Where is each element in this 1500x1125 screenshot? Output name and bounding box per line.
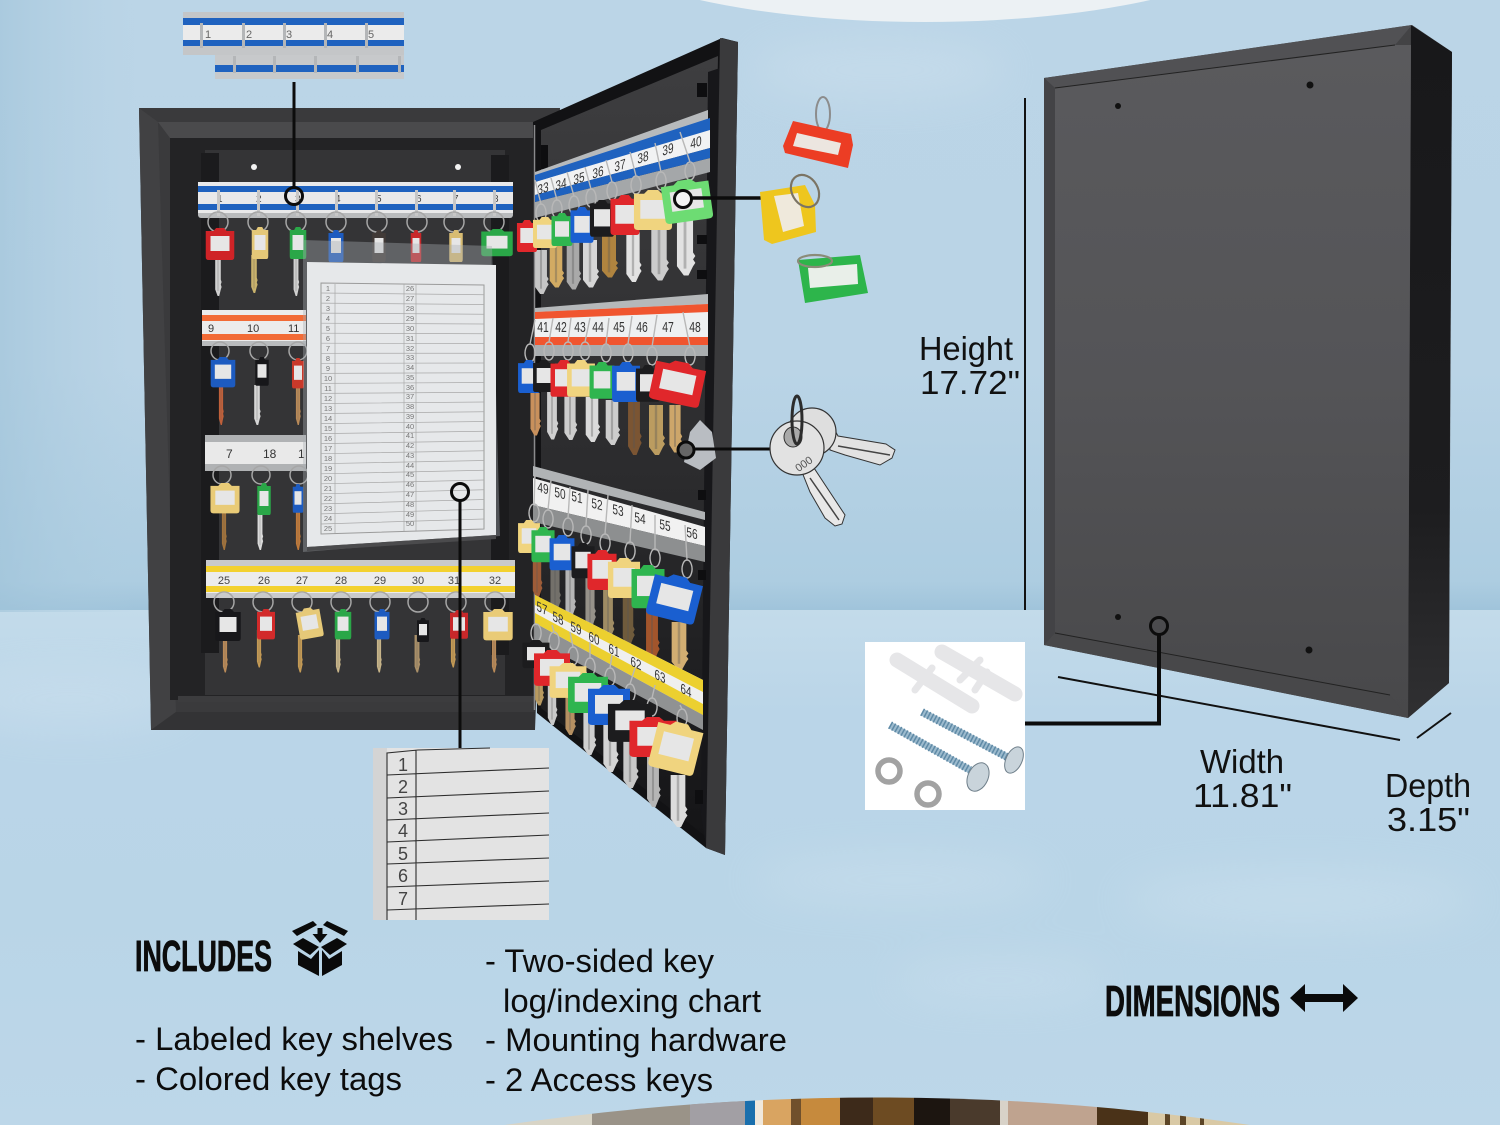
door blue shelf, hooks 33-40: 37 — [614, 156, 626, 175]
plastic sleeve and two-sided key log chart: 33 — [406, 353, 414, 362]
inset: key log chart close-up: 3 — [398, 799, 408, 819]
top white curved banner — [565, 0, 1285, 22]
plastic sleeve and two-sided key log chart: 1 — [326, 284, 330, 293]
includes list, right column: - Mounting hardware — [485, 1022, 787, 1058]
door yellow shelf, hooks 57-64 — [535, 595, 703, 730]
includes list, right column: - 2 Access keys — [485, 1062, 713, 1098]
plastic sleeve and two-sided key log chart: 7 — [326, 344, 330, 353]
plastic sleeve and two-sided key log chart: 44 — [406, 461, 414, 470]
door yellow shelf, hooks 57-64: 62 — [631, 653, 641, 674]
product: back of cabinet — [1044, 25, 1452, 718]
callout: key log line — [452, 484, 468, 748]
callout: access key line — [678, 442, 771, 458]
blue key shelf, hooks 1-8: 3 — [295, 194, 301, 205]
yellow key shelf, hooks 25-32: 29 — [374, 575, 386, 587]
yellow key shelf, hooks 25-32: 26 — [258, 575, 270, 587]
inset: key log chart close-up: 1 — [398, 755, 408, 775]
inset: key log chart close-up: 7 — [398, 889, 408, 909]
orange key shelf, hooks 9-11: 11 — [288, 323, 299, 335]
door lock cam — [684, 420, 716, 470]
plastic sleeve and two-sided key log chart — [303, 240, 500, 552]
plastic sleeve and two-sided key log chart: 37 — [406, 392, 414, 401]
plastic sleeve and two-sided key log chart: 3 — [326, 304, 330, 313]
yellow key shelf, hooks 25-32: 28 — [335, 575, 347, 587]
plastic sleeve and two-sided key log chart: 26 — [406, 284, 414, 293]
bottom curved photo strip — [506, 1098, 1250, 1125]
width label — [1193, 743, 1292, 814]
inset: key log chart close-up — [373, 748, 549, 920]
plastic sleeve and two-sided key log chart: 6 — [326, 334, 330, 343]
heading: dimensions: DIMENSIONS — [1105, 977, 1280, 1026]
inset: labeled key shelf close-up: 3 — [286, 29, 292, 41]
plastic sleeve and two-sided key log chart: 14 — [324, 414, 332, 423]
blue key shelf, hooks 1-8: 2 — [256, 194, 262, 205]
door yellow shelf, hooks 57-64: 60 — [589, 628, 599, 649]
callout: key tag line — [674, 190, 762, 208]
dimension line: depth — [1417, 713, 1451, 738]
plastic sleeve and two-sided key log chart: 4 — [326, 314, 330, 323]
yellow key shelf, hooks 25-32: 31 — [448, 575, 460, 587]
plastic sleeve and two-sided key log chart: 2 — [326, 294, 330, 303]
door white shelf, hooks 49-56: 50 — [554, 484, 566, 503]
cabinet body frame — [139, 108, 560, 730]
plastic sleeve and two-sided key log chart: 10 — [324, 374, 332, 383]
plastic sleeve and two-sided key log chart: 31 — [406, 334, 414, 343]
plastic sleeve and two-sided key log chart: 15 — [324, 424, 332, 433]
white key shelf, hooks 17-19: 18 — [263, 447, 277, 461]
door orange shelf, hooks 41-48: 46 — [636, 319, 648, 335]
plastic sleeve and two-sided key log chart: 11 — [324, 384, 332, 393]
orange key shelf, hooks 9-11: 9 — [208, 323, 214, 335]
plastic sleeve and two-sided key log chart: 29 — [406, 314, 414, 323]
includes list, left column: - Labeled key shelves — [135, 1021, 453, 1057]
plastic sleeve and two-sided key log chart: 35 — [406, 373, 414, 382]
yellow key shelf, hooks 25-32: 27 — [296, 575, 308, 587]
icon: double-headed arrow — [1290, 984, 1358, 1012]
inset: labeled key shelf close-up: 1 — [205, 29, 211, 41]
plastic sleeve and two-sided key log chart: 48 — [406, 500, 414, 509]
plastic sleeve and two-sided key log chart: 30 — [406, 324, 414, 333]
door orange shelf, hooks 41-48: 44 — [592, 319, 604, 335]
keys on white shelf — [210, 466, 308, 550]
inset: key log chart close-up: 2 — [398, 777, 408, 797]
yellow key shelf, hooks 25-32: 32 — [489, 575, 501, 587]
door white shelf, hooks 49-56: 55 — [659, 516, 671, 535]
door blue shelf, hooks 33-40: 33 — [537, 179, 549, 198]
plastic sleeve and two-sided key log chart: 27 — [406, 294, 414, 303]
door orange shelf, hooks 41-48: 42 — [555, 319, 567, 335]
door orange shelf, hooks 41-48: 43 — [574, 319, 586, 335]
orange key shelf, hooks 9-11 — [202, 310, 306, 346]
plastic sleeve and two-sided key log chart: 43 — [406, 451, 414, 460]
door yellow shelf, hooks 57-64: 57 — [537, 598, 547, 619]
height label: 17.72" — [920, 364, 1020, 401]
door yellow shelf, hooks 57-64: 64 — [681, 680, 691, 701]
inset: key log chart close-up: 4 — [398, 821, 408, 841]
yellow key shelf, hooks 25-32: 30 — [412, 575, 424, 587]
orange key shelf, hooks 9-11: 10 — [247, 323, 259, 335]
door white shelf, hooks 49-56: 49 — [537, 479, 549, 498]
includes list, right column: log/indexing chart — [503, 983, 761, 1019]
door blue shelf, hooks 33-40: 39 — [662, 140, 674, 159]
keys on door yellow shelf — [522, 624, 705, 827]
includes list, left column — [135, 1021, 453, 1097]
open cabinet door — [533, 38, 738, 855]
plastic sleeve and two-sided key log chart: 50 — [406, 519, 414, 528]
width label: Width — [1200, 743, 1284, 780]
keys on orange shelf — [211, 342, 307, 425]
plastic sleeve and two-sided key log chart: 40 — [406, 422, 414, 431]
icon: yellow key tag — [760, 170, 825, 244]
depth label: Depth — [1385, 767, 1471, 804]
door orange shelf, hooks 41-48: 47 — [662, 319, 674, 335]
plastic sleeve and two-sided key log chart: 17 — [324, 444, 332, 453]
plastic sleeve and two-sided key log chart: 34 — [406, 363, 414, 372]
door blue shelf, hooks 33-40: 34 — [555, 175, 567, 194]
white key shelf, hooks 17-19: 7 — [226, 447, 233, 461]
includes list, right column: - Two-sided key — [485, 943, 714, 979]
dimension line: width — [1058, 677, 1400, 740]
blue key shelf, hooks 1-8: 7 — [453, 194, 459, 205]
plastic sleeve and two-sided key log chart: 46 — [406, 480, 414, 489]
door yellow shelf, hooks 57-64: 61 — [609, 640, 619, 661]
plastic sleeve and two-sided key log chart: 47 — [406, 490, 414, 499]
height label — [919, 330, 1020, 401]
icon: red key tag — [783, 97, 853, 168]
inset: labeled key shelf close-up: 5 — [368, 29, 374, 41]
door white shelf, hooks 49-56: 52 — [591, 495, 603, 514]
door orange shelf, hooks 41-48: 48 — [689, 319, 701, 335]
includes list, right column — [485, 943, 787, 1098]
plastic sleeve and two-sided key log chart: 21 — [324, 484, 332, 493]
includes list, left column: - Colored key tags — [135, 1061, 402, 1097]
plastic sleeve and two-sided key log chart: 8 — [326, 354, 330, 363]
plastic sleeve and two-sided key log chart: 38 — [406, 402, 414, 411]
door blue shelf, hooks 33-40: 36 — [592, 163, 604, 182]
blue key shelf, hooks 1-8: 1 — [217, 194, 223, 205]
door orange shelf, hooks 41-48: 41 — [537, 319, 549, 335]
yellow key shelf, hooks 25-32 — [206, 560, 515, 598]
white key shelf, hooks 17-19: 1 — [298, 447, 305, 461]
door blue shelf, hooks 33-40 — [535, 110, 710, 218]
door yellow shelf, hooks 57-64: 63 — [655, 666, 665, 687]
plastic sleeve and two-sided key log chart: 32 — [406, 344, 414, 353]
plastic sleeve and two-sided key log chart: 18 — [324, 454, 332, 463]
plastic sleeve and two-sided key log chart: 19 — [324, 464, 332, 473]
icon: green key tag — [798, 255, 868, 303]
blue key shelf, hooks 1-8 — [198, 182, 513, 218]
icon: open box — [292, 921, 348, 976]
depth label — [1385, 767, 1471, 838]
dimension line: height — [1024, 98, 1026, 610]
door blue shelf, hooks 33-40: 38 — [637, 148, 649, 167]
height label: Height — [919, 330, 1013, 367]
icon: two access keys — [770, 396, 895, 526]
width label: 11.81" — [1193, 777, 1292, 814]
inset: labeled key shelf close-up: 4 — [327, 29, 333, 41]
depth label: 3.15" — [1387, 801, 1470, 838]
plastic sleeve and two-sided key log chart: 49 — [406, 510, 414, 519]
inset: key log chart close-up: 6 — [398, 866, 408, 886]
keys on door orange shelf — [518, 312, 707, 455]
plastic sleeve and two-sided key log chart: 16 — [324, 434, 332, 443]
door white shelf, hooks 49-56: 56 — [686, 524, 698, 543]
blue key shelf, hooks 1-8: 5 — [376, 194, 382, 205]
plastic sleeve and two-sided key log chart: 22 — [324, 494, 332, 503]
heading: includes: INCLUDES — [135, 932, 272, 981]
inset: labeled key shelf close-up: 2 — [246, 29, 252, 41]
plastic sleeve and two-sided key log chart: 45 — [406, 470, 414, 479]
door blue shelf, hooks 33-40: 35 — [573, 169, 585, 188]
door white shelf, hooks 49-56: 51 — [571, 488, 583, 507]
plastic sleeve and two-sided key log chart: 41 — [406, 431, 414, 440]
keys on yellow shelf — [214, 592, 513, 672]
door orange shelf, hooks 41-48 — [535, 294, 708, 356]
inset: labeled key shelf close-up — [183, 12, 404, 79]
blue key shelf, hooks 1-8: 4 — [335, 194, 341, 205]
keys on blue shelf — [206, 212, 513, 296]
plastic sleeve and two-sided key log chart: 28 — [406, 304, 414, 313]
inset: mounting hardware — [865, 642, 1027, 810]
plastic sleeve and two-sided key log chart: 5 — [326, 324, 330, 333]
plastic sleeve and two-sided key log chart: 39 — [406, 412, 414, 421]
white key shelf, hooks 17-19 — [205, 435, 306, 471]
blue key shelf, hooks 1-8: 6 — [416, 194, 422, 205]
callout: shelf line — [286, 82, 302, 204]
plastic sleeve and two-sided key log chart: 9 — [326, 364, 330, 373]
plastic sleeve and two-sided key log chart: 42 — [406, 441, 414, 450]
plastic sleeve and two-sided key log chart: 25 — [324, 524, 332, 533]
door yellow shelf, hooks 57-64: 58 — [553, 608, 563, 629]
product: open key cabinet — [139, 38, 738, 855]
callout: mounting hardware line — [1025, 618, 1168, 724]
door white shelf, hooks 49-56: 53 — [612, 501, 624, 520]
keys on door blue shelf — [517, 132, 714, 294]
door orange shelf, hooks 41-48: 45 — [613, 319, 625, 335]
door white shelf, hooks 49-56 — [533, 466, 705, 562]
plastic sleeve and two-sided key log chart: 36 — [406, 383, 414, 392]
plastic sleeve and two-sided key log chart: 24 — [324, 514, 332, 523]
plastic sleeve and two-sided key log chart: 12 — [324, 394, 332, 403]
blue key shelf, hooks 1-8: 8 — [493, 194, 499, 205]
inset: key log chart close-up: 5 — [398, 844, 408, 864]
plastic sleeve and two-sided key log chart: 13 — [324, 404, 332, 413]
icon: two access keys: 000 — [793, 454, 815, 475]
yellow key shelf, hooks 25-32: 25 — [218, 575, 230, 587]
plastic sleeve and two-sided key log chart: 23 — [324, 504, 332, 513]
door blue shelf, hooks 33-40: 40 — [690, 133, 702, 152]
keys on door white shelf — [518, 475, 704, 670]
door white shelf, hooks 49-56: 54 — [634, 509, 646, 528]
plastic sleeve and two-sided key log chart: 20 — [324, 474, 332, 483]
door yellow shelf, hooks 57-64: 59 — [571, 618, 581, 639]
